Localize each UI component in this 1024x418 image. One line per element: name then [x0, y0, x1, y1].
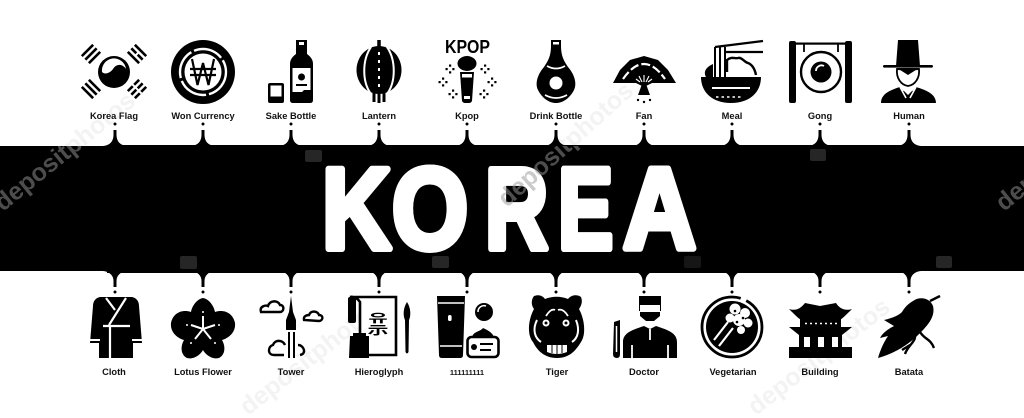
- item: Drink Bottle: [530, 40, 582, 146]
- icon: fan: [613, 56, 676, 103]
- label: Batata: [895, 367, 924, 377]
- camera watermarks: [180, 149, 952, 269]
- connector: [191, 122, 215, 146]
- icon: kpop microphone: KPOP: [445, 36, 490, 57]
- item: Hieroglyph: [348, 271, 410, 377]
- item: Fan: [613, 56, 676, 146]
- icon: sake bottle and glass: [268, 40, 313, 103]
- connector: [367, 271, 391, 294]
- item: Gong: [789, 41, 852, 146]
- connector: [544, 271, 568, 294]
- icon: lantern: [356, 40, 402, 103]
- label: Cloth: [102, 367, 126, 377]
- icon: won coin: [171, 40, 235, 104]
- icon: gong: [789, 41, 852, 103]
- watermark on white: depositphotos: [742, 293, 895, 418]
- icon: robe: [90, 297, 142, 358]
- label: Lantern: [362, 111, 396, 121]
- connector: [632, 122, 656, 146]
- icon: tiger face: [529, 295, 584, 358]
- watermark on band: depositphotos: [492, 76, 639, 212]
- title: A: [623, 144, 696, 273]
- label: Meal: [722, 111, 742, 121]
- item: Tiger: [529, 271, 584, 377]
- label: Won Currency: [171, 111, 236, 121]
- icon: drink bottle: [537, 40, 575, 103]
- connector: [720, 122, 744, 146]
- label: Kpop: [455, 111, 479, 121]
- title: [322, 144, 696, 274]
- label: Korea Flag: [90, 111, 138, 121]
- title: E: [558, 145, 613, 274]
- watermark on white: depositphotos: [234, 293, 387, 418]
- icon: korea flag: [82, 45, 146, 98]
- connector: [103, 271, 127, 294]
- label: Doctor: [629, 367, 659, 377]
- label: Hieroglyph: [355, 367, 404, 377]
- black title band: [0, 145, 1024, 273]
- icon: flower: [171, 298, 235, 358]
- title: O: [392, 144, 468, 273]
- label: 111111111: [450, 368, 484, 377]
- item: Cloth: [90, 271, 142, 377]
- label: Gong: [808, 111, 832, 121]
- connector: [897, 122, 921, 146]
- icon: vegetables on plate: [702, 297, 762, 357]
- connector: [632, 271, 656, 294]
- icon: doctor with scalpel: [613, 296, 677, 358]
- connector: [544, 122, 568, 146]
- item: Lantern: [356, 40, 402, 146]
- label: Building: [801, 367, 839, 377]
- item: Won Currency: [171, 40, 236, 146]
- label: Sake Bottle: [266, 111, 316, 121]
- connector: [897, 271, 921, 294]
- item: Building: [789, 271, 852, 377]
- watermark on white: [0, 76, 895, 418]
- label: Lotus Flower: [174, 367, 232, 377]
- title: K: [322, 145, 391, 274]
- icon: scroll, ink and brush: 유: [368, 312, 388, 325]
- connector: [808, 271, 832, 294]
- label: Tower: [278, 367, 305, 377]
- watermark on white: depositphotos: [492, 76, 639, 212]
- item: 111111111: [437, 271, 498, 377]
- title: R: [485, 145, 548, 273]
- item: Batata: [878, 271, 940, 377]
- item: Tower: [261, 271, 322, 377]
- connector: [279, 271, 303, 294]
- item: Human: [881, 40, 936, 146]
- connector: [808, 122, 832, 146]
- icon: man in hat: [881, 40, 936, 103]
- icon: scroll, ink and brush: 示: [368, 324, 389, 337]
- connector: [279, 122, 303, 146]
- item: Kpop: [438, 36, 496, 146]
- connector: [367, 122, 391, 146]
- icon: noodle bowl: [701, 41, 763, 103]
- item: Lotus Flower: [171, 271, 235, 377]
- item: Sake Bottle: [266, 40, 316, 146]
- icon: seoul tower with clouds: [261, 296, 322, 358]
- connector: [720, 271, 744, 294]
- connector: [455, 271, 479, 294]
- icon: palace gate: [789, 303, 852, 358]
- label: Fan: [636, 111, 653, 121]
- connector: [103, 122, 127, 146]
- item: Korea Flag: [82, 45, 146, 146]
- label: Drink Bottle: [530, 111, 582, 121]
- item: Vegetarian: [702, 271, 762, 377]
- icon: cosmetics: [437, 296, 498, 358]
- connector: [455, 122, 479, 146]
- icon: scroll, ink and brush: [348, 297, 410, 358]
- label: Human: [893, 111, 925, 121]
- connector: [191, 271, 215, 294]
- label: Tiger: [546, 367, 569, 377]
- label: Vegetarian: [709, 367, 757, 377]
- item: Meal: [701, 41, 763, 146]
- icon: sweet potato: [878, 296, 940, 358]
- item: Doctor: [613, 271, 677, 377]
- watermark on band: [0, 146, 1024, 210]
